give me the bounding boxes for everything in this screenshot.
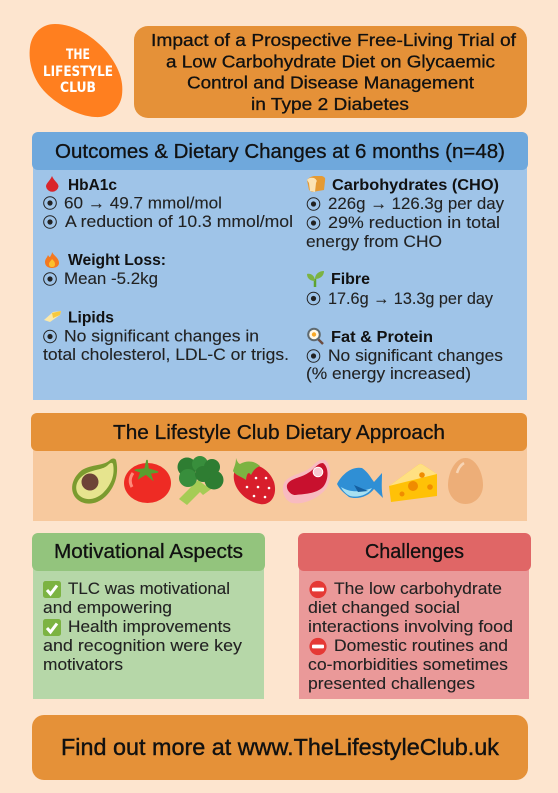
heading: motivational aspects	[32, 533, 265, 571]
logo: The Lifestyle Club: LIFESTYLE	[43, 64, 113, 80]
list: motivators: and empowering	[43, 599, 172, 617]
block: fibre	[307, 271, 494, 308]
block: carbohydrates: Carbohydrates (CHO)	[332, 177, 499, 194]
list: motivators	[43, 580, 243, 674]
block: carbohydrates: 29% reduction in total	[328, 214, 500, 232]
list: challenges: co-morbidities sometimes	[308, 656, 508, 674]
icon: strawberry	[233, 458, 275, 504]
list: challenges: presented challenges	[308, 675, 475, 693]
panel: dietary approach	[31, 413, 527, 521]
block: fat and protein	[306, 328, 503, 383]
block: fat and protein: (% energy increased)	[306, 365, 471, 383]
list: motivators: and recognition were key	[43, 637, 243, 655]
heading: challenges	[298, 533, 531, 571]
block: carbohydrates: 226g → 126.3g per day	[328, 195, 505, 213]
panel: motivational aspects	[32, 533, 265, 699]
heading: dietary approach	[31, 413, 527, 451]
icon: cheese	[389, 464, 437, 502]
block: fat and protein: Fat & Protein	[331, 329, 433, 346]
block: lipids: total cholesterol, LDL-C or trigs.	[43, 346, 289, 364]
block: carbohydrates: energy from CHO	[306, 233, 442, 251]
icon: tomato	[124, 460, 171, 503]
block: weight loss: Weight Loss:	[68, 252, 166, 269]
title: a Low Carbohydrate Diet on Glycaemic	[166, 52, 495, 72]
list: motivators: motivators	[43, 656, 123, 674]
panel: challenges	[298, 533, 531, 699]
list: challenges: The low carbohydrate	[334, 580, 502, 598]
list: challenges	[308, 580, 513, 693]
heading: outcomes: Outcomes & Dietary Changes at 6 months (n=48)	[55, 141, 505, 163]
block: carbohydrates	[306, 176, 505, 251]
call to action: website	[32, 715, 528, 780]
block: fibre: Fibre	[331, 271, 370, 288]
heading: outcomes	[32, 132, 528, 170]
block: lipids: Lipids	[68, 310, 114, 326]
list: challenges: Domestic routines and	[334, 637, 508, 655]
icon: broccoli	[178, 456, 224, 505]
list: motivators: TLC was motivational	[68, 580, 230, 598]
block: lipids	[43, 310, 289, 364]
logo: The Lifestyle Club	[30, 24, 122, 117]
title: Impact of a Prospective Free-Living Trial of	[151, 30, 516, 50]
block: weight loss: Mean -5.2kg	[64, 270, 158, 288]
title: in Type 2 Diabetes	[251, 94, 409, 114]
icon: meat	[283, 460, 330, 503]
icon: fish	[337, 468, 383, 498]
title	[134, 26, 527, 118]
icon: egg	[448, 458, 483, 504]
block: lipids: No significant changes in	[64, 328, 259, 346]
block: HbA1c	[44, 176, 293, 231]
block: fibre: 17.6g → 13.3g per day	[328, 290, 494, 308]
logo: The Lifestyle Club: CLUB	[60, 80, 96, 96]
heading: challenges: Challenges	[365, 541, 464, 563]
icon: avocado	[72, 458, 117, 504]
heading: motivational aspects: Motivational Aspects	[54, 541, 243, 563]
list: challenges: diet changed social	[308, 599, 460, 617]
panel: outcomes and dietary changes	[32, 132, 528, 400]
title: Control and Disease Management	[187, 72, 474, 92]
block: HbA1c: HbA1c	[68, 177, 117, 194]
call to action: website: Find out more at www.TheLifestyleClub.uk	[61, 734, 499, 760]
block: HbA1c: A reduction of 10.3 mmol/mol	[65, 213, 293, 231]
list: motivators: Health improvements	[68, 618, 231, 636]
heading: dietary approach: The Lifestyle Club Dietary Approach	[113, 422, 445, 444]
block: HbA1c: 60 → 49.7 mmol/mol	[64, 194, 222, 212]
logo: The Lifestyle Club: THE	[66, 47, 90, 63]
block: weight loss	[44, 252, 166, 288]
list: challenges: interactions involving food	[308, 618, 513, 636]
block: fat and protein: No significant changes	[328, 347, 503, 365]
